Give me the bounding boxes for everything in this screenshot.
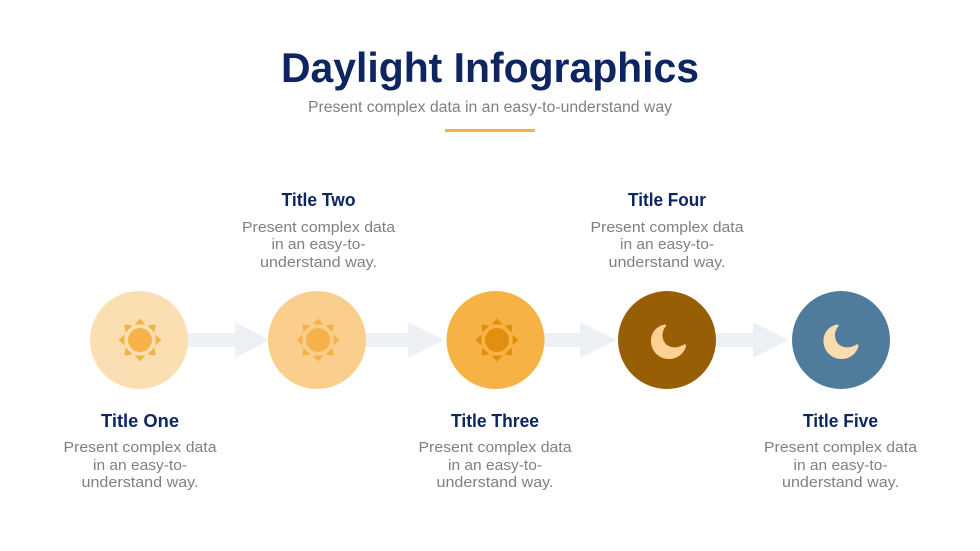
text block: title one: Present complex data xyxy=(64,439,217,456)
text block: title four: Title Four xyxy=(628,190,706,210)
text block: title three: in an easy-to- xyxy=(448,457,542,474)
text block: title three: Present complex data xyxy=(418,439,572,456)
text block: title two: in an easy-to- xyxy=(272,236,366,253)
text block: title three: Title Three xyxy=(451,411,539,431)
text block: title four: Present complex data xyxy=(590,219,744,236)
text block: title two: Present complex data xyxy=(242,219,396,236)
arrow: three to four xyxy=(544,322,616,358)
step four circle with moon icon xyxy=(618,291,716,389)
arrow: one to two xyxy=(187,322,269,358)
text block: title five: in an easy-to- xyxy=(794,457,888,474)
text block: title three xyxy=(418,411,572,491)
text block: title one: in an easy-to- xyxy=(93,457,187,474)
text block: title two xyxy=(242,190,396,271)
text block: title three: understand way. xyxy=(436,474,554,491)
text block: title five xyxy=(764,411,918,491)
text block: title five: Title Five xyxy=(803,411,878,431)
text block: title one: Title One xyxy=(101,411,179,431)
title underline xyxy=(445,129,535,132)
step one circle with sun icon xyxy=(90,291,188,389)
text block: title four: in an easy-to- xyxy=(620,236,714,253)
text block: title five: understand way. xyxy=(782,474,899,491)
title: Daylight Infographics xyxy=(281,44,699,91)
subtitle: Present complex data in an easy-to-understand way xyxy=(308,99,672,116)
text block: title four xyxy=(590,190,744,271)
arrow: two to three xyxy=(365,322,444,358)
text block: title one xyxy=(64,411,217,491)
text block: title one: understand way. xyxy=(82,474,198,491)
text block: title five: Present complex data xyxy=(764,439,918,456)
text block: title two: Title Two xyxy=(282,190,356,210)
step five circle with moon icon xyxy=(792,291,890,389)
text block: title four: understand way. xyxy=(608,254,726,271)
arrow: four to five xyxy=(716,322,788,358)
step two circle with sun icon xyxy=(268,291,366,389)
step three circle with sun icon xyxy=(446,291,544,389)
text block: title two: understand way. xyxy=(260,254,377,271)
